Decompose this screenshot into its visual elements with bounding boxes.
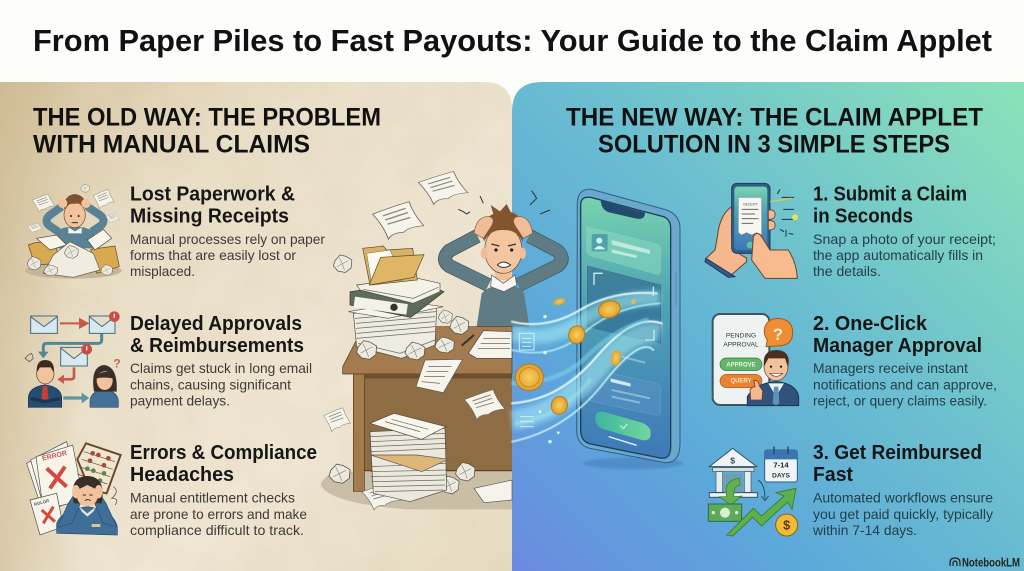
icon: manager approval phone: APPROVE <box>726 363 756 369</box>
text block <box>130 442 317 538</box>
panel: new way <box>512 82 1024 571</box>
text block: the details. <box>813 263 881 279</box>
icon: manager approval phone: PENDING <box>726 333 756 340</box>
paper stack and binder on desk <box>348 277 444 358</box>
floor shadow <box>321 472 512 509</box>
text block <box>813 313 997 408</box>
icon: bank, calendar, money: DAYS <box>772 472 790 479</box>
text block: Headaches <box>130 464 234 486</box>
text block: Managers receive instant <box>813 360 968 376</box>
text block: Automated workflows ensure <box>813 490 993 506</box>
text block: & Reimbursements <box>130 335 304 357</box>
floor paper stack <box>369 413 512 503</box>
text block: notifications and can approve, <box>813 376 997 392</box>
floating papers <box>323 171 505 510</box>
text block: the app automatically fills in <box>813 247 983 263</box>
text block: 1. Submit a Claim <box>813 184 967 206</box>
folder <box>363 246 424 285</box>
heading: old way <box>33 104 381 159</box>
text block: payment delays. <box>130 392 230 408</box>
icon: manager approval phone <box>713 314 799 406</box>
text block: are prone to errors and make <box>130 506 307 522</box>
flow of data and coins <box>512 293 662 443</box>
heading: new way: SOLUTION IN 3 SIMPLE STEPS <box>598 131 950 159</box>
text block: 2. One-Click <box>813 313 928 335</box>
desk <box>343 327 512 491</box>
text block: Delayed Approvals <box>130 313 302 335</box>
text block: compliance difficult to track. <box>130 522 304 538</box>
text block: in Seconds <box>813 206 913 228</box>
icon: manager approval phone: QUERY <box>730 379 752 385</box>
panel: old way <box>0 82 512 571</box>
text block: Lost Paperwork & <box>130 184 295 206</box>
coin <box>515 364 543 391</box>
item: delayed approvals <box>25 311 312 408</box>
icon: buried in paperwork <box>25 184 122 279</box>
icon: phone snapping receipt <box>705 183 798 278</box>
text block: Manager Approval <box>813 335 982 357</box>
coin <box>567 324 587 345</box>
icon: manager approval phone: ? <box>773 325 783 344</box>
icon: errors and abacus <box>27 442 121 535</box>
text block <box>130 184 325 279</box>
item: errors and compliance <box>27 442 317 538</box>
text block: forms that are easily lost or <box>130 247 296 263</box>
text block: 3. Get Reimbursed <box>813 442 982 464</box>
icon: phone <box>577 189 683 469</box>
heading: new way: THE NEW WAY: THE CLAIM APPLET <box>566 104 983 132</box>
icon: bank, calendar, money: $ <box>730 455 735 465</box>
crumpled paper balls <box>329 255 475 494</box>
text block <box>812 442 993 538</box>
text block: reject, or query claims easily. <box>813 392 987 408</box>
heading: new way <box>566 104 983 159</box>
text block: chains, causing significant <box>130 376 291 392</box>
worker body <box>445 191 562 327</box>
step 3 <box>708 442 993 538</box>
icon: email chain: ? <box>113 356 121 370</box>
text block: Fast <box>813 464 853 486</box>
icon: errors and abacus: ROLOR <box>33 498 51 507</box>
documents on desk <box>416 331 512 393</box>
text block <box>130 313 312 408</box>
heading: old way: THE OLD WAY: THE PROBLEM <box>33 104 381 132</box>
icon: bank, calendar, money <box>708 447 798 536</box>
text block: you get paid quickly, typically <box>813 506 993 522</box>
step 1 <box>705 183 996 279</box>
text block: Claims get stuck in long email <box>130 360 312 376</box>
text block: Snap a photo of your receipt; <box>813 231 996 247</box>
icon: phone snapping receipt: RECEIPT <box>743 203 758 207</box>
icon: email chain <box>25 311 121 407</box>
text block: Missing Receipts <box>130 206 289 228</box>
text block <box>813 184 996 279</box>
coin <box>597 298 622 320</box>
icon: errors and abacus: ERROR <box>42 450 68 463</box>
text block: Manual processes rely on paper <box>130 231 325 247</box>
text block: within 7-14 days. <box>812 522 917 538</box>
text block: misplaced. <box>130 263 195 279</box>
icon: bank, calendar, money: $ <box>783 519 790 533</box>
icon: bank, calendar, money: 7-14 <box>773 461 789 470</box>
heading: old way: WITH MANUAL CLAIMS <box>33 131 310 159</box>
item: lost paperwork <box>25 184 325 279</box>
title band <box>0 0 1024 82</box>
central illustration: stressed worker at desk <box>321 171 562 510</box>
text block: Manual entitlement checks <box>130 490 295 506</box>
title: From Paper Piles to Fast Payouts: Your Guide to the Claim Applet <box>33 23 992 58</box>
text block: Errors & Compliance <box>130 442 317 464</box>
icon: manager approval phone: APPROVAL <box>723 341 759 348</box>
step 2 <box>713 313 997 408</box>
coin <box>549 395 569 416</box>
